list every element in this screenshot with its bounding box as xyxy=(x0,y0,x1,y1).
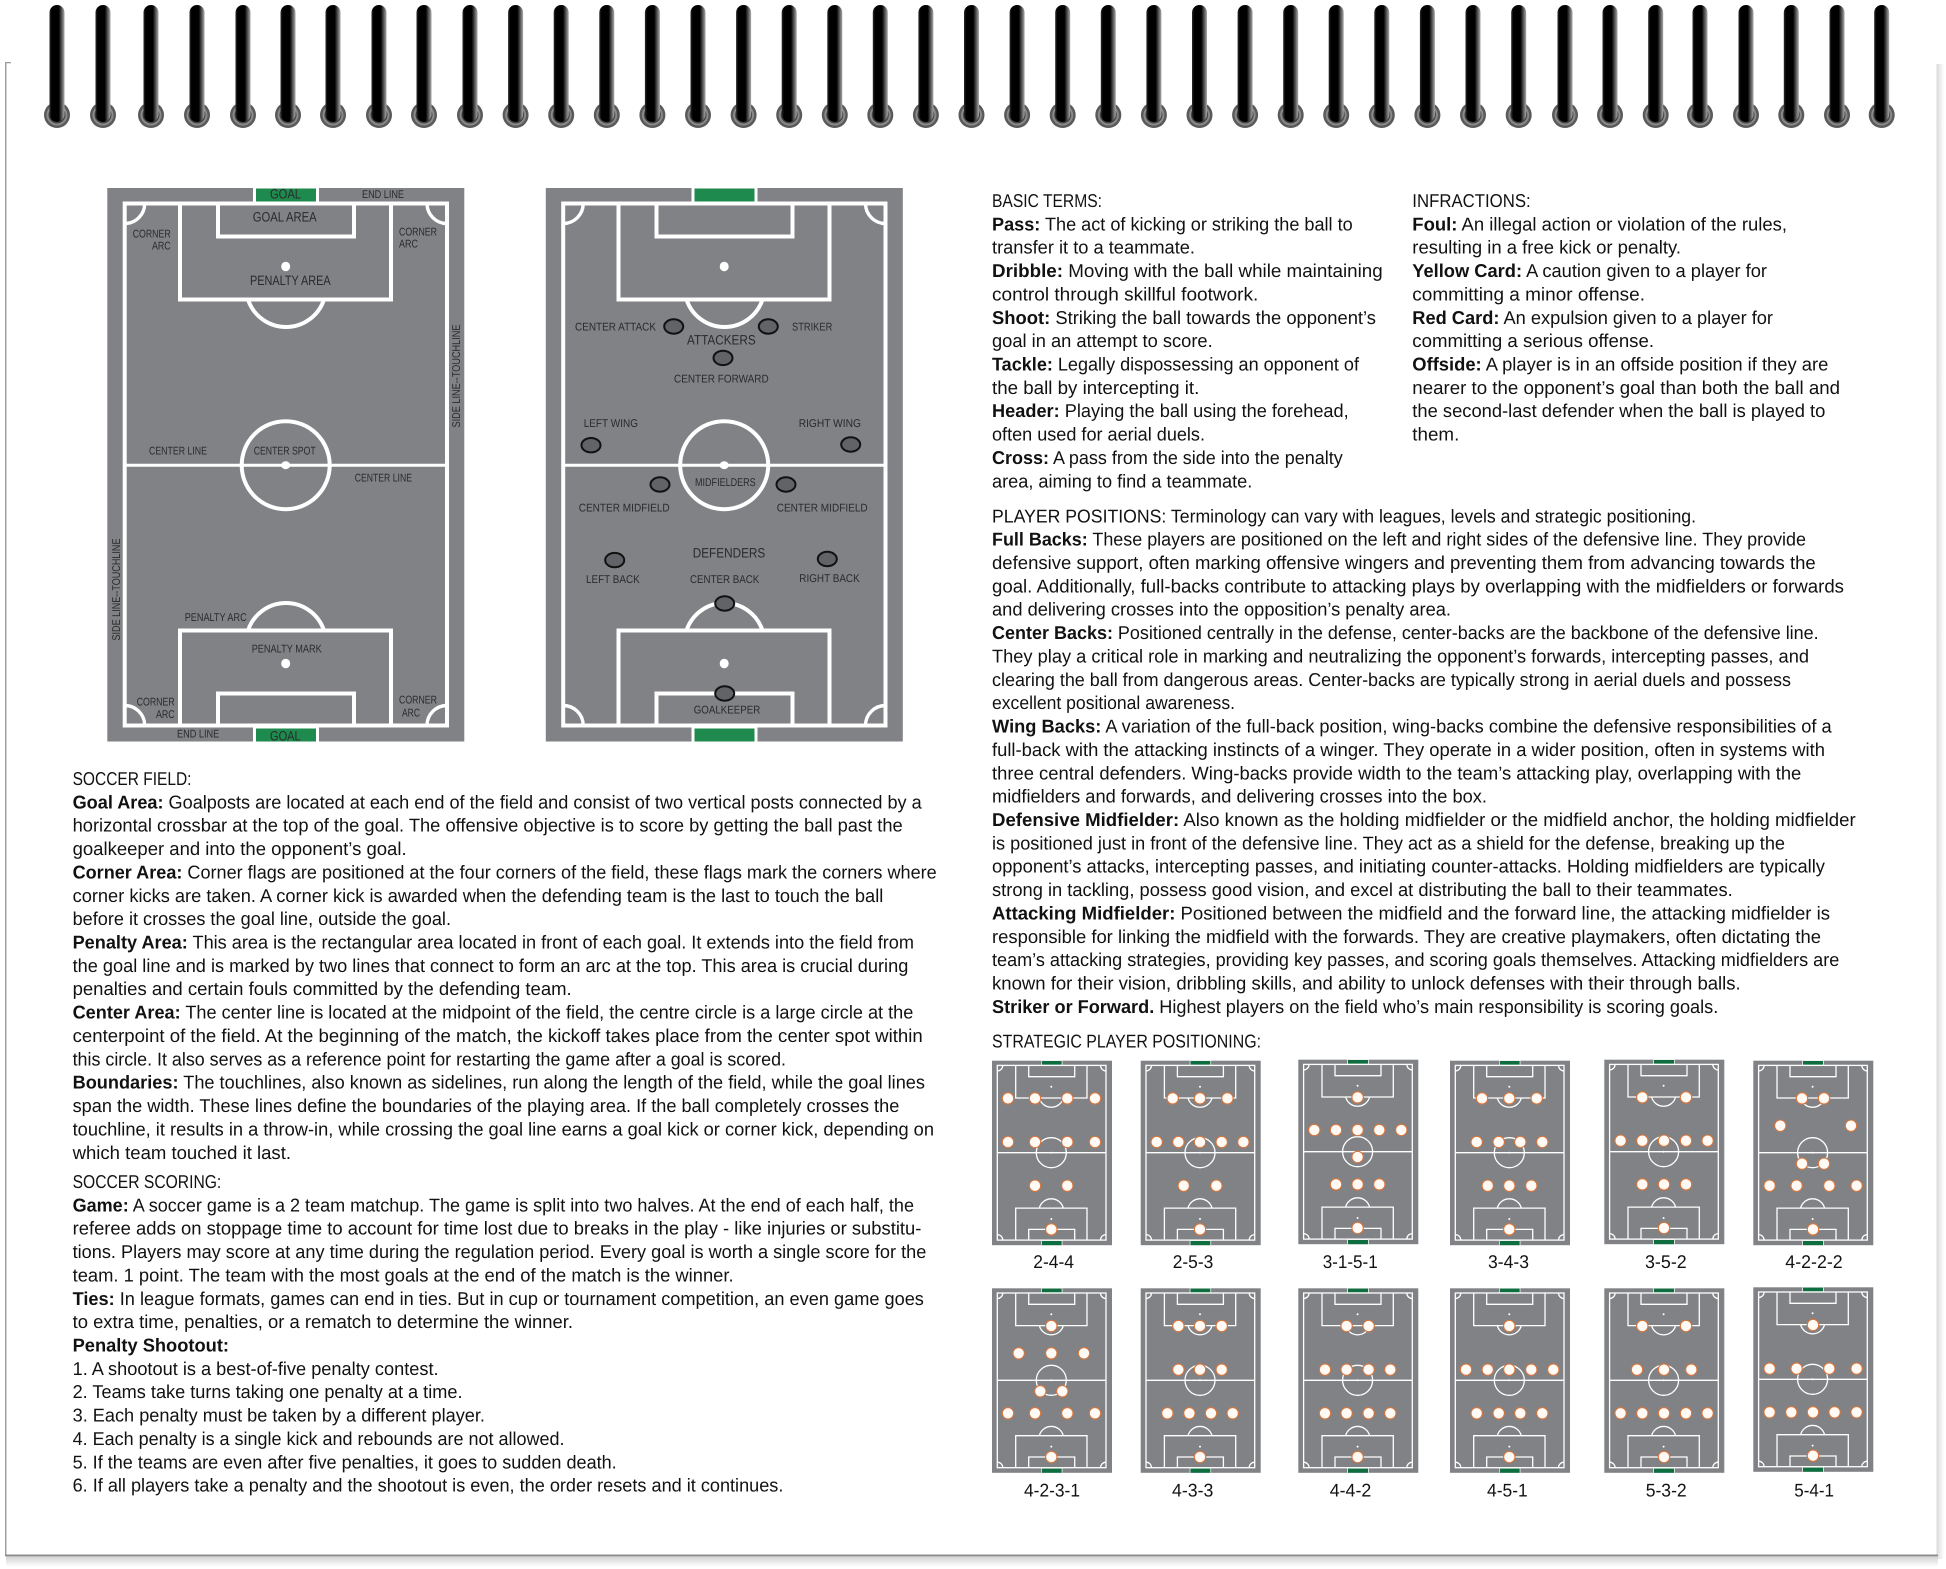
formation caption row one: 3-4-3 xyxy=(1488,1251,1529,1272)
text block: basic terms: Cross: A pass from the side into the penalty xyxy=(992,447,1343,468)
diagram: soccer field with labelled areas: SIDE LINE--TOUCHLINE xyxy=(111,538,123,640)
text block: soccer field: which team touched it last. xyxy=(72,1142,291,1163)
formation diagram: 4-2-2-2 xyxy=(1753,1061,1873,1245)
text block: soccer field: this circle. It also serves as a reference point for restarting the game after a goal is scored. xyxy=(73,1048,786,1069)
text block: basic terms: often used for aerial duels. xyxy=(992,424,1205,445)
text block: soccer field: corner kicks are taken. A corner kick is awarded when the defending team is the last to touch the ball xyxy=(73,885,883,906)
diagram: soccer field with player positions: CENTER MIDFIELD xyxy=(777,502,868,514)
diagram: soccer field with labelled areas: PENALTY MARK xyxy=(252,644,322,656)
diagram: soccer field with player positions: DEFENDERS xyxy=(693,546,765,560)
text block: soccer scoring: tions. Players may score at any time during the regulation period. Every goal is worth a single score for the xyxy=(73,1241,926,1262)
diagram: soccer field with labelled areas: PENALTY AREA xyxy=(250,273,331,288)
diagram: soccer field with player positions: RIGHT BACK xyxy=(799,573,860,585)
text block: player positions: Full Backs: These players are positioned on the left and right sides of the defensive line. They provide xyxy=(992,529,1806,550)
formation diagram: 4-4-2 xyxy=(1298,1288,1418,1473)
formation diagram: 2-4-4 xyxy=(992,1061,1112,1245)
diagram: soccer field with labelled areas: ARC xyxy=(156,709,175,721)
text block: soccer field: touchline, it results in a throw-in, while crossing the goal line earns a goal kick or corner kick, depending on xyxy=(73,1118,934,1139)
text block: player positions: Center Backs: Positioned centrally in the defense, center-backs are the backbone of the defensive line. xyxy=(992,622,1819,643)
diagram: soccer field with labelled areas: CENTER LINE xyxy=(149,446,207,458)
text block: player positions: team’s attacking strategies, providing key passes, and scoring goals themselves. Attacking midfielders are xyxy=(992,949,1839,970)
text block: infractions: INFRACTIONS: xyxy=(1412,190,1531,211)
text block: soccer scoring: 5. If the teams are even after five penalties, it goes to sudden death. xyxy=(73,1451,617,1472)
diagram: soccer field with labelled areas xyxy=(107,186,464,744)
formation caption row one: 4-2-2-2 xyxy=(1785,1251,1843,1272)
text block: player positions: clearing the ball from dangerous areas. Center-backs are typically strong in aerial duels and possess xyxy=(992,669,1791,690)
text block: soccer field: penalties and certain fouls committed by the defending team. xyxy=(73,978,572,999)
text block: player positions: They play a critical role in marking and neutralizing the opponent’s forwards, intercepting passes, and xyxy=(992,646,1809,666)
text block: soccer scoring xyxy=(73,1171,926,1496)
text block: soccer scoring: 2. Teams take turns taking one penalty at a time. xyxy=(73,1381,462,1402)
text block: basic terms: transfer it to a teammate. xyxy=(992,237,1195,258)
diagram: soccer field with labelled areas: ARC xyxy=(402,708,420,720)
text block: infractions: committing a serious offense. xyxy=(1412,330,1654,351)
diagram: soccer field with labelled areas: CENTER SPOT xyxy=(254,446,316,458)
formation diagram: 4-3-3 xyxy=(1141,1288,1261,1473)
diagram: soccer field with player positions: CENTER FORWARD xyxy=(674,374,769,386)
diagram: soccer field with labelled areas: GOAL xyxy=(270,186,301,202)
diagram: soccer field with labelled areas: ARC xyxy=(399,238,418,250)
text block: player positions: midfielders and forwards, and delivering crosses into the box. xyxy=(992,786,1487,807)
formation caption row two: 4-3-3 xyxy=(1172,1480,1213,1501)
diagram: soccer field with player positions: MIDFIELDERS xyxy=(695,477,756,489)
text block: player positions: Striker or Forward. Highest players on the field who’s main responsibility is scoring goals. xyxy=(992,996,1718,1017)
formation diagram: 3-4-3 xyxy=(1450,1061,1570,1245)
text block: soccer field: goalkeeper and into the opponent’s goal. xyxy=(73,838,407,859)
text block: infractions xyxy=(1412,190,1840,445)
text block: basic terms xyxy=(992,190,1383,491)
diagram: soccer field with labelled areas: CENTER LINE xyxy=(355,472,412,484)
text block: player positions: is positioned just in front of the defensive line. They act as a shield for the defense, breaking up the xyxy=(992,832,1785,853)
text block: player positions: three central defenders. Wing-backs provide width to the team’s attacking play, overlapping with the xyxy=(992,762,1801,783)
text block: basic terms: the ball by intercepting it. xyxy=(992,377,1199,398)
diagram: soccer field with labelled areas: CORNER xyxy=(133,228,171,240)
text block: infractions: committing a minor offense. xyxy=(1412,283,1645,304)
diagram: soccer field with labelled areas: ARC xyxy=(152,240,171,252)
text block: soccer scoring: referee adds on stoppage time to account for time lost due to breaks in the play - like injuries or substitu- xyxy=(73,1218,921,1239)
formation diagram: 5-4-1 xyxy=(1753,1287,1873,1472)
text block: basic terms: Tackle: Legally dispossessing an opponent of xyxy=(992,354,1360,374)
diagram: soccer field with player positions xyxy=(546,188,903,742)
diagram: soccer field with labelled areas: END LINE xyxy=(177,728,220,740)
text block: infractions: resulting in a free kick or penalty. xyxy=(1412,237,1681,258)
text block: soccer scoring: Ties: In league formats, games can end in ties. But in cup or tournament competition, an even game goes xyxy=(73,1288,924,1309)
diagram: soccer field with labelled areas: CORNER xyxy=(399,694,437,706)
diagram: soccer field with player positions: CENTER MIDFIELD xyxy=(579,502,670,514)
diagram: soccer field with player positions: STRIKER xyxy=(792,322,832,334)
diagram: soccer field with labelled areas: CORNER xyxy=(399,226,437,238)
formation diagram: 2-5-3 xyxy=(1141,1061,1261,1245)
text block: player positions: Wing Backs: A variation of the full-back position, wing-backs combine the defensive responsibilities of a xyxy=(992,716,1832,736)
formation diagram: 5-3-2 xyxy=(1604,1288,1724,1473)
formation caption row one: 2-4-4 xyxy=(1033,1251,1074,1272)
text block: soccer field: centerpoint of the field. At the beginning of the match, the kickoff takes place from the center spot within xyxy=(73,1025,923,1046)
text block: basic terms: Pass: The act of kicking or striking the ball to xyxy=(992,213,1353,234)
text block: soccer field: the goal line and is marked by two lines that connect to form an arc at the top. This area is crucial during xyxy=(73,955,908,976)
text block: soccer scoring: Game: A soccer game is a 2 team matchup. The game is split into two halves. At the end of each half, the xyxy=(73,1194,914,1215)
text block: player positions: PLAYER POSITIONS: Terminology can vary with leagues, levels and strategic positioning. xyxy=(992,505,1696,526)
text block: player positions: Defensive Midfielder: Also known as the holding midfielder or the midfield anchor, the holding midfielder xyxy=(992,809,1856,830)
text block: player positions: responsible for linking the midfield with the forwards. They are creative playmakers, often dictating the xyxy=(992,926,1821,947)
text block: soccer field: Center Area: The center line is located at the midpoint of the field, the centre circle is a large circle at the xyxy=(73,1002,913,1023)
formation caption row one: 3-5-2 xyxy=(1645,1251,1687,1272)
text block: soccer scoring: to extra time, penalties, or a rematch to determine the winner. xyxy=(73,1311,573,1332)
diagram: soccer field with player positions: ATTACKERS xyxy=(687,332,756,348)
text block: soccer scoring: team. 1 point. The team with the most goals at the end of the match is the winner. xyxy=(73,1264,734,1285)
formation caption row two: 5-4-1 xyxy=(1794,1480,1834,1501)
formation caption row two: 5-3-2 xyxy=(1646,1480,1687,1501)
diagram: soccer field with player positions: LEFT WING xyxy=(584,418,638,430)
text block: infractions: Offside: A player is in an offside position if they are xyxy=(1412,354,1828,374)
heading: strategic player positioning: STRATEGIC PLAYER POSITIONING: xyxy=(992,1030,1261,1051)
text block: basic terms: Header: Playing the ball using the forehead, xyxy=(992,400,1349,421)
text block: player positions: strong in tackling, possess good vision, and excel at distributing the ball to their teammates. xyxy=(992,879,1733,900)
diagram: soccer field with labelled areas: GOAL AREA xyxy=(253,210,317,224)
text block: player positions: known for their vision, dribbling skills, and ability to unlock defenses with their through balls. xyxy=(992,972,1741,994)
diagram: soccer field with labelled areas: SIDE LINE--TOUCHLINE xyxy=(451,324,463,428)
text block: soccer field: Corner Area: Corner flags are positioned at the four corners of the field, these flags mark the corners where xyxy=(73,861,937,882)
spiral binding rings xyxy=(44,5,1895,128)
text block: player positions xyxy=(992,505,1856,1017)
text block: soccer field: span the width. These lines define the boundaries of the playing area. If the ball completely crosses the xyxy=(73,1095,899,1116)
text block: infractions: Yellow Card: A caution given to a player for xyxy=(1412,260,1767,281)
text block: soccer field xyxy=(72,768,937,1163)
text block: basic terms: control through skillful footwork. xyxy=(992,283,1258,304)
diagram: soccer field with player positions: CENTER ATTACK xyxy=(575,322,656,334)
formation caption row one: 2-5-3 xyxy=(1173,1251,1213,1272)
text block: soccer scoring: 4. Each penalty is a single kick and rebounds are not allowed. xyxy=(73,1428,564,1449)
formation caption row two: 4-5-1 xyxy=(1487,1480,1528,1501)
text block: soccer field: Goal Area: Goalposts are located at each end of the field and consist of two vertical posts connected by a xyxy=(73,791,922,812)
formation diagram: 3-1-5-1 xyxy=(1298,1060,1418,1244)
text block: infractions: nearer to the opponent’s goal than both the ball and xyxy=(1412,377,1840,398)
text block: soccer scoring: 6. If all players take a penalty and the shootout is even, the order resets and it continues. xyxy=(73,1475,783,1496)
diagram: soccer field with labelled areas: GOAL xyxy=(270,728,301,744)
formation caption row one xyxy=(1033,1251,1843,1272)
text block: player positions: goal. Additionally, full-backs contribute to attacking plays by overlapping with the midfielders or forwards xyxy=(992,575,1844,596)
text block: soccer field: SOCCER FIELD: xyxy=(73,768,192,789)
diagram: soccer field with labelled areas: END LINE xyxy=(362,189,404,201)
text block: infractions: Foul: An illegal action or violation of the rules, xyxy=(1412,213,1787,234)
text block: infractions: Red Card: An expulsion given to a player for xyxy=(1412,307,1773,328)
text block: player positions: opponent’s attacks, intercepting passes, and initiating counter-attacks. Holding midfielders are typically xyxy=(992,856,1826,877)
formation diagram: 3-5-2 xyxy=(1604,1060,1724,1244)
text block: basic terms: goal in an attempt to score. xyxy=(992,330,1213,351)
text block: soccer field: before it crosses the goal line, outside the goal. xyxy=(73,908,451,929)
text block: player positions: defensive support, often marking offensive wingers and preventing them from advancing towards the xyxy=(992,552,1816,573)
text block: soccer scoring: 3. Each penalty must be taken by a different player. xyxy=(73,1405,485,1426)
text block: player positions: full-back with the attacking instincts of a winger. They operate in a wider position, often in systems with xyxy=(992,739,1825,760)
text block: soccer scoring: 1. A shootout is a best-of-five penalty contest. xyxy=(73,1358,439,1379)
text block: soccer scoring: Penalty Shootout: xyxy=(73,1334,229,1356)
text block: basic terms: area, aiming to find a teammate. xyxy=(992,470,1252,491)
diagram: soccer field with labelled areas: PENALTY ARC xyxy=(185,612,247,624)
diagram: soccer field with player positions: GOALKEEPER xyxy=(694,704,760,716)
diagram: soccer field with player positions: RIGHT WING xyxy=(799,418,861,430)
text block: soccer field: Penalty Area: This area is the rectangular area located in front of each goal. It extends into the field from xyxy=(73,932,914,952)
text block: soccer scoring: SOCCER SCORING: xyxy=(73,1171,221,1192)
formation diagram: 4-5-1 xyxy=(1450,1288,1570,1473)
diagram: soccer field with player positions: CENTER BACK xyxy=(690,574,760,586)
formation diagram: 4-2-3-1 xyxy=(992,1288,1112,1473)
text block: basic terms: Shoot: Striking the ball towards the opponent’s xyxy=(992,307,1376,328)
formation caption row two: 4-2-3-1 xyxy=(1024,1480,1080,1501)
text block: player positions: excellent positional awareness. xyxy=(992,692,1235,713)
text block: infractions: the second-last defender when the ball is played to xyxy=(1412,400,1825,421)
text block: infractions: them. xyxy=(1412,424,1459,445)
formation caption row one: 3-1-5-1 xyxy=(1323,1251,1378,1272)
diagram: soccer field with labelled areas: CORNER xyxy=(137,696,175,708)
diagram: soccer field with player positions: LEFT BACK xyxy=(586,574,640,586)
text block: soccer field: horizontal crossbar at the top of the goal. The offensive objective is to score by getting the ball past the xyxy=(73,815,903,836)
formation caption row two: 4-4-2 xyxy=(1330,1480,1371,1501)
formation caption row two xyxy=(1024,1480,1834,1501)
text block: player positions: Attacking Midfielder: Positioned between the midfield and the forward line, the attacking midfielder is xyxy=(992,902,1830,923)
text block: player positions: and delivering crosses into the opposition’s penalty area. xyxy=(992,599,1451,620)
text block: soccer field: Boundaries: The touchlines, also known as sidelines, run along the length of the field, while the goal lines xyxy=(73,1072,925,1093)
text block: basic terms: BASIC TERMS: xyxy=(992,190,1102,211)
text block: basic terms: Dribble: Moving with the ball while maintaining xyxy=(992,260,1383,281)
